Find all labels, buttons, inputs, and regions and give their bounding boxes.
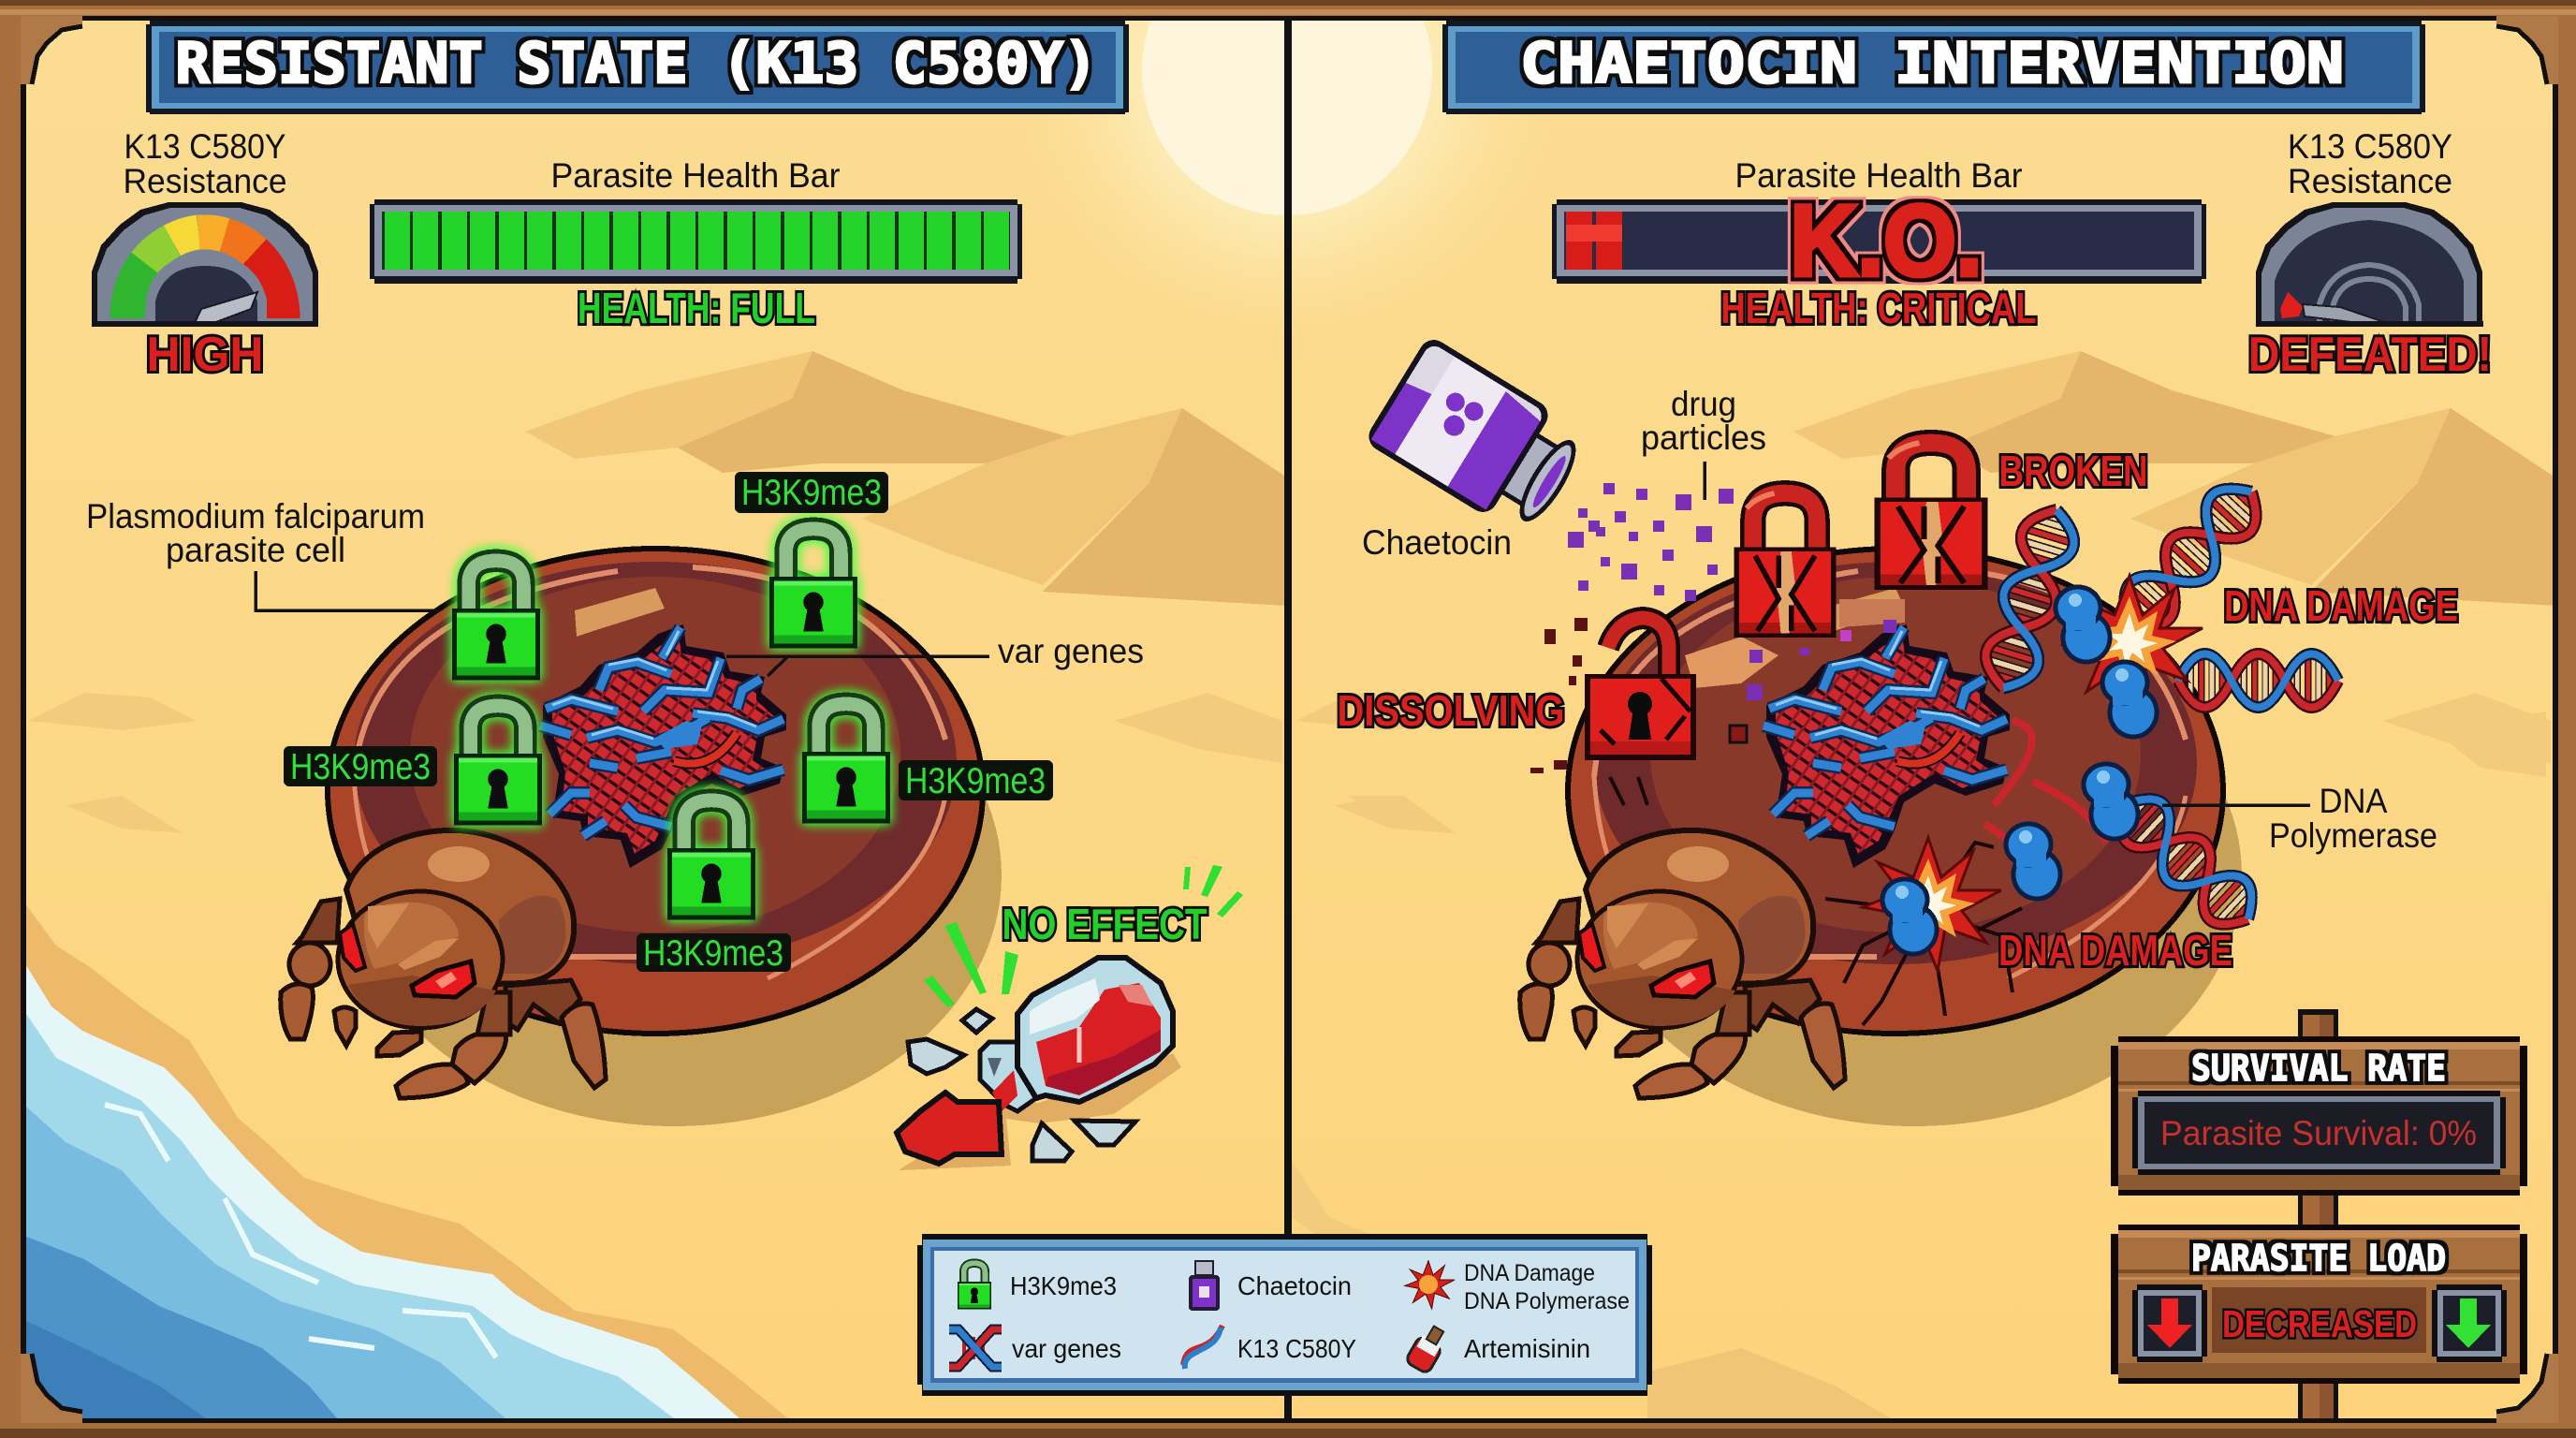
burst: upper (2064, 576, 2203, 709)
health bar: full (370, 199, 1022, 284)
green impact sparks (924, 865, 1243, 1007)
lock: bottom (667, 800, 755, 919)
dunes right (1292, 351, 2555, 1418)
lock: left (454, 706, 542, 825)
title banner: chaetocin intervention (1442, 21, 2425, 114)
sign: survival rate: Parasite Survival: 0% (2160, 1114, 2477, 1152)
lock: top right (769, 529, 857, 648)
lock: right (802, 704, 890, 823)
resistance gauge: defeated (2256, 202, 2483, 327)
K.O. stamp: K.O. (1790, 183, 1983, 297)
cell erosion debris (1685, 599, 1905, 742)
sign: parasite load: PARASITE LOAD (2191, 1238, 2446, 1279)
vial: chaetocin (1363, 334, 1594, 543)
divider between panels (1284, 21, 1292, 1418)
callout: var genes: var genes (998, 632, 1144, 670)
legend (917, 1234, 1652, 1396)
burst: lower (1863, 838, 2001, 971)
legend: K13 C580Y (1183, 1326, 1356, 1369)
callout: DNA polymerase: DNA (2320, 782, 2388, 820)
legend: DNA damage and DNA polymerase: DNA Polymerase (1464, 1288, 1630, 1314)
legend: artemisinin: Artemisinin (1464, 1334, 1590, 1363)
callout: DNA polymerase: Polymerase (2269, 816, 2437, 855)
arrow: red down (2132, 1284, 2207, 1362)
legend: H3K9me3 (958, 1263, 1117, 1310)
DNA helix: horizontal (2178, 653, 2338, 708)
title banner: resistant state: RESISTANT STATE (K13 C580Y) (176, 31, 1097, 96)
legend: chaetocin: Chaetocin (1237, 1271, 1352, 1300)
label: dissolving: DISSOLVING (1337, 686, 1565, 735)
label: broken: BROKEN (1999, 447, 2147, 495)
shards (908, 1009, 1135, 1161)
flask neck (980, 1042, 1036, 1111)
legend: var genes: var genes (1012, 1334, 1121, 1363)
callout: parasite cell: parasite cell (166, 531, 345, 569)
parasite cell (328, 549, 1002, 1126)
panel: chaetocin intervention (1337, 21, 2527, 1418)
callout: drug particles: particles (1641, 418, 1766, 457)
label: DNA damage lower: DNA DAMAGE (1998, 926, 2232, 975)
var genes tangle (1764, 624, 2010, 868)
panel: resistant state (86, 21, 1243, 1170)
health bar: critical (1552, 199, 2206, 284)
callout: parasite cell: Plasmodium falciparum (86, 497, 425, 536)
resistance gauge: high (92, 202, 318, 327)
drug particles (1568, 483, 1896, 700)
broken artemisinin flask (897, 958, 1181, 1170)
tag: H3K9me3 right: H3K9me3 (905, 761, 1046, 801)
sign: parasite load (2111, 1225, 2527, 1384)
cracks in cell (1610, 777, 2022, 1025)
callout: DNA polymerase (2162, 782, 2437, 855)
DNA helix: upper right (2110, 474, 2271, 640)
DNA helix: lower right (2107, 785, 2266, 939)
var genes tangle (540, 624, 786, 868)
flask body (1017, 958, 1173, 1102)
gauge label line 2: Resistance (124, 162, 286, 200)
health status: critical: HEALTH: CRITICAL (1720, 284, 2037, 332)
title banner: resistant state (146, 21, 1129, 114)
callout: var genes (726, 632, 1144, 676)
callout: drug particles (1641, 385, 1766, 500)
legend: artemisinin (1405, 1322, 1590, 1374)
gauge label line 2: Resistance (2288, 162, 2452, 200)
gauge status: high: HIGH (146, 328, 264, 382)
legend: var genes (949, 1329, 1121, 1367)
callout: drug particles: drug (1671, 385, 1736, 423)
gauge label: K13 C580Y (124, 127, 286, 166)
arrow: green down (2432, 1284, 2507, 1362)
gauge status: defeated: DEFEATED! (2248, 328, 2492, 382)
legend: chaetocin (1189, 1261, 1352, 1311)
dunes left (28, 351, 1287, 833)
spilled liquid (992, 1070, 1017, 1111)
label: chaetocin: Chaetocin (1362, 523, 1512, 562)
red lock: broken right (1875, 443, 1987, 590)
legend: H3K9me3: H3K9me3 (1010, 1271, 1117, 1300)
tag: H3K9me3 left: H3K9me3 (290, 747, 431, 787)
sign: parasite load: DECREASED (2222, 1302, 2417, 1345)
tag: H3K9me3 top: H3K9me3 (741, 473, 882, 513)
health bar label: Parasite Health Bar (550, 156, 841, 195)
post (2298, 1009, 2338, 1418)
tag: H3K9me3 bottom: H3K9me3 (643, 933, 783, 974)
extra red and blue strands from genes to damage sites (1984, 721, 2106, 843)
parasite cell (1568, 549, 2242, 1126)
gauge label: K13 C580Y (2288, 127, 2452, 166)
lock: top left (452, 561, 540, 680)
sign: survival rate: SURVIVAL RATE (2191, 1048, 2446, 1089)
DNA polymerase blobs (1882, 587, 2157, 954)
health bar label: Parasite Health Bar (1735, 156, 2022, 195)
health status: full: HEALTH: FULL (578, 284, 815, 332)
legend: DNA damage and DNA polymerase: DNA Damage (1464, 1260, 1595, 1286)
legend: K13 C580Y: K13 C580Y (1237, 1334, 1356, 1363)
red lock: dissolving (1530, 618, 1696, 773)
DNA helix: vertical (1978, 503, 2082, 696)
legend: DNA damage and DNA polymerase (1405, 1260, 1630, 1314)
callout: parasite cell (86, 497, 439, 610)
sun (1069, 21, 1506, 298)
title banner: chaetocin intervention: CHAETOCIN INTERVENTION (1520, 31, 2344, 96)
hermit crab parasite (281, 830, 606, 1098)
beach and water (24, 902, 788, 1418)
sign: survival rate (2111, 1036, 2527, 1196)
hermit crab parasite (1520, 830, 1845, 1098)
label: DNA damage upper: DNA DAMAGE (2224, 581, 2458, 630)
red lock: broken left (1734, 493, 1837, 638)
no effect label: NO EFFECT (1002, 900, 1208, 948)
signpost (2111, 1009, 2527, 1418)
